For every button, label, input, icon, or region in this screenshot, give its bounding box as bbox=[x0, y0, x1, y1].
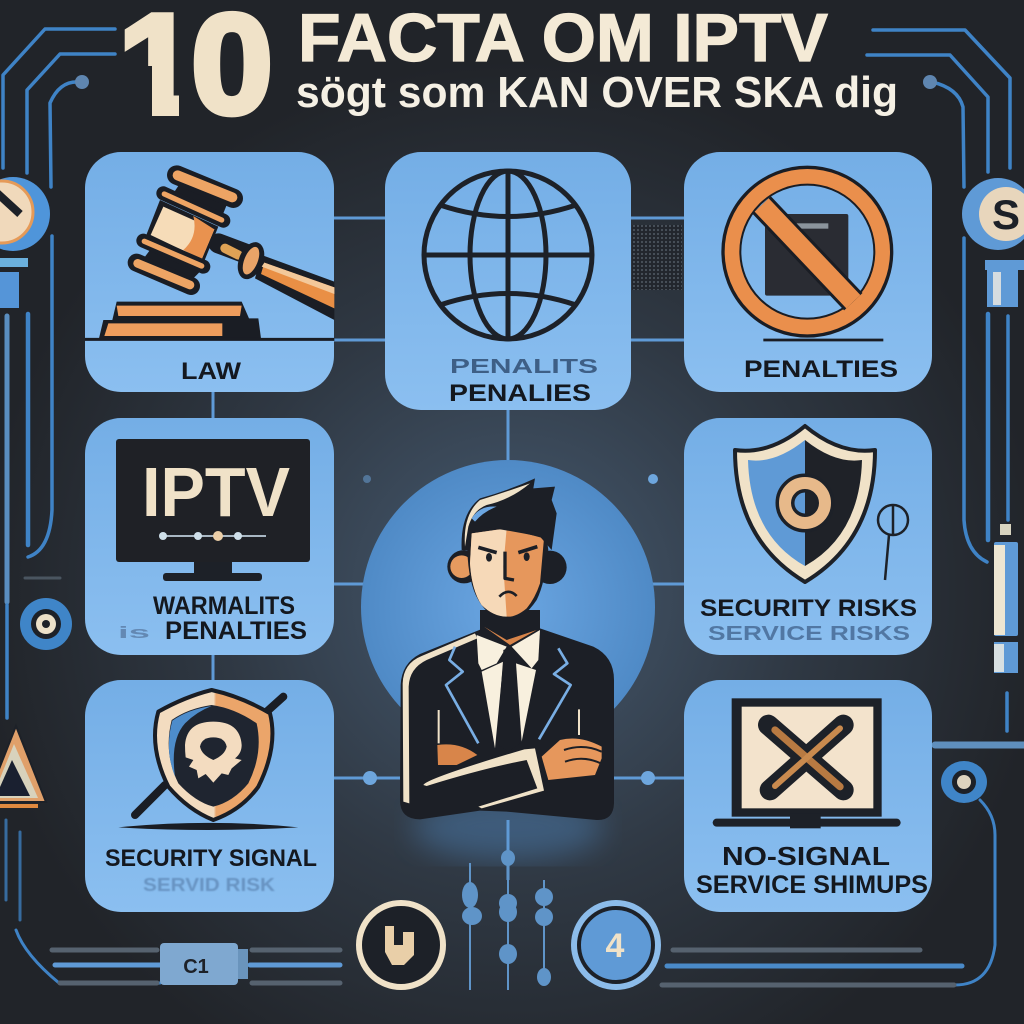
icon: bottom connector box: C1 bbox=[183, 956, 209, 978]
icon: globe bbox=[424, 171, 592, 339]
panel: security signal bbox=[85, 680, 334, 912]
panel label: security risks lines: SECURITY RISKS bbox=[700, 595, 917, 622]
panel label: security risks lines bbox=[700, 595, 917, 645]
panel: IPTV warnings bbox=[85, 418, 334, 655]
panel label: no signal lines: NO-SIGNAL bbox=[722, 841, 890, 871]
man bbox=[400, 478, 614, 820]
icon: right side connector bbox=[994, 524, 1018, 673]
icon: right small ring bbox=[941, 761, 987, 803]
icon: bottom sliders bbox=[462, 850, 553, 990]
icon: prohibition sign bbox=[731, 176, 883, 340]
panel label: no signal lines bbox=[696, 841, 928, 899]
icon: key bbox=[878, 505, 908, 580]
textured noise patch bbox=[632, 225, 682, 290]
panel label: security risks lines: SERVICE RISKS bbox=[708, 623, 910, 645]
panel label: warnings lines: WARMALITS bbox=[153, 592, 295, 620]
panel label: law: LAW bbox=[181, 358, 241, 385]
icon: left small ring bbox=[20, 598, 72, 650]
icon: left warning badge bbox=[0, 177, 50, 308]
title number bbox=[124, 10, 270, 118]
title line one: FACTA OM IPTV bbox=[298, 0, 828, 76]
panel label: penalties lines: PENALITS bbox=[450, 356, 598, 378]
icon: bottom left button bbox=[359, 903, 443, 987]
icon: bottom right button: 4 bbox=[606, 927, 625, 965]
icon: IPTV television bbox=[116, 439, 310, 581]
center figure: angry man in suit bbox=[361, 460, 655, 820]
panel: security risks bbox=[684, 418, 932, 655]
panel label: penalties lines bbox=[449, 356, 598, 407]
panel label: penalties lines: PENALIES bbox=[449, 380, 591, 407]
panel: globe penalties bbox=[385, 152, 631, 410]
icon: right badge bbox=[962, 178, 1024, 307]
panel label: penalties: PENALTIES bbox=[744, 356, 898, 383]
icon: warning triangle bbox=[0, 726, 46, 806]
connector dots bbox=[363, 474, 658, 785]
icon: crossed monitor bbox=[717, 698, 897, 828]
connector lines between panels bbox=[213, 218, 684, 880]
panel label: warnings lines: PENALTIES bbox=[165, 617, 307, 645]
icon: gavel bbox=[85, 175, 334, 339]
faded label: SERVID RISK bbox=[143, 875, 275, 895]
title bbox=[124, 10, 896, 118]
icon: skull bbox=[185, 722, 242, 783]
title line two: sögt som KAN OVER SKA dig bbox=[296, 68, 898, 117]
icon: skull shield bbox=[118, 690, 298, 830]
panel label: no signal lines: SERVICE SHIMUPS bbox=[696, 871, 928, 899]
panel label: warnings lines: is bbox=[118, 623, 150, 642]
panel label: security signal: SECURITY SIGNAL bbox=[105, 845, 317, 872]
bottom cables bbox=[52, 950, 962, 985]
icon: right badge: S bbox=[992, 191, 1020, 238]
icon: bottom connector box bbox=[160, 943, 248, 985]
icon: shield bbox=[735, 426, 875, 582]
icon text: IPTV: IPTV bbox=[142, 453, 290, 531]
panel label: warnings lines bbox=[118, 592, 307, 645]
panel: no signal bbox=[684, 680, 932, 912]
icon: bottom right button bbox=[571, 900, 661, 990]
halo circle bbox=[361, 460, 655, 754]
panel: law bbox=[85, 152, 334, 392]
panel: prohibition penalties bbox=[684, 152, 932, 392]
